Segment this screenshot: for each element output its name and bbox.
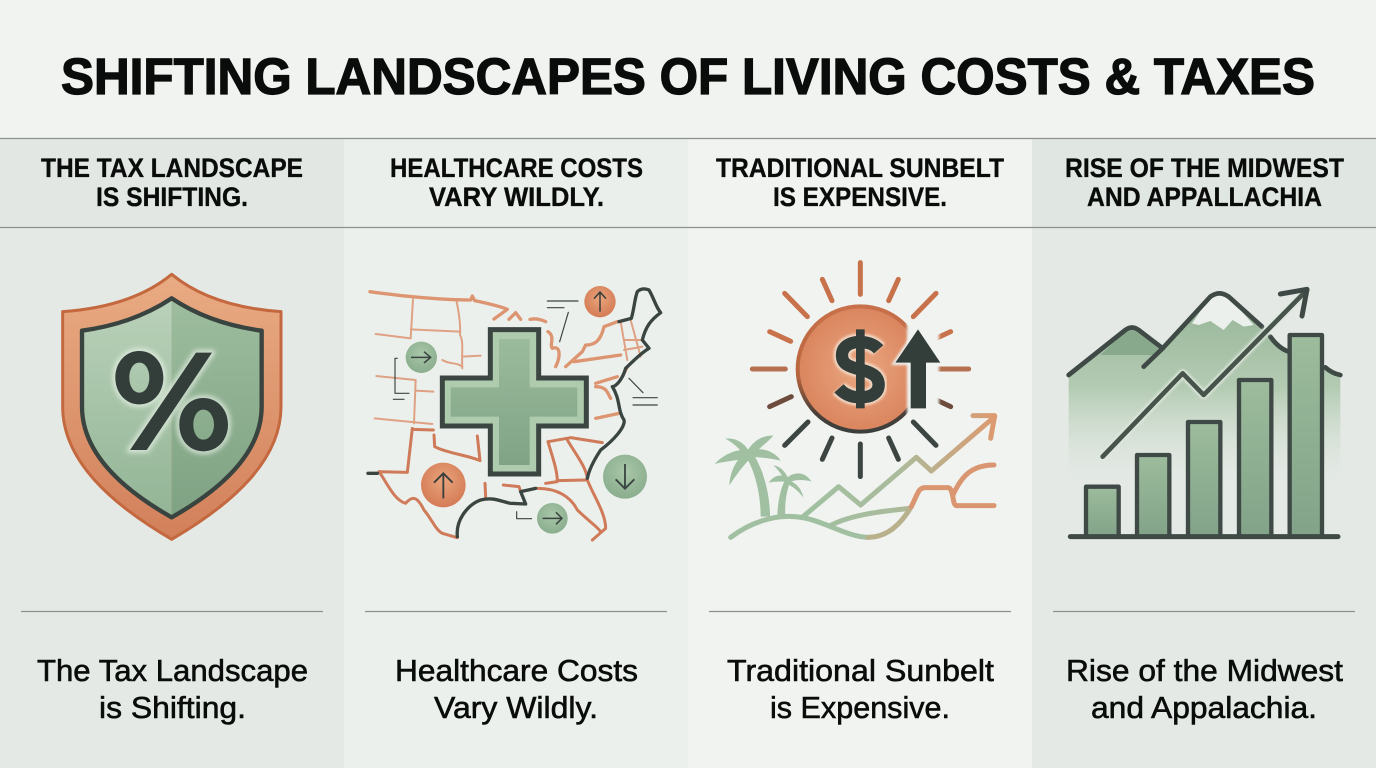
baseline <box>1070 529 1338 544</box>
icon: mountains and rising bar chart <box>1069 289 1340 537</box>
caption: tax landscape: The Tax Landscape <box>37 653 308 688</box>
heading: sunbelt: TRADITIONAL SUNBELT <box>716 153 1004 183</box>
mountain outline <box>1069 293 1340 375</box>
heading: midwest: RISE OF THE MIDWEST <box>1065 153 1344 183</box>
sun rays <box>752 263 969 477</box>
arrow badge: up large <box>421 463 466 507</box>
caption: tax landscape <box>37 653 308 725</box>
caption: sunbelt: is Expensive. <box>770 690 950 725</box>
trend arrow <box>1103 289 1307 457</box>
caption: sunbelt: Traditional Sunbelt <box>727 653 994 688</box>
heading: healthcare: VARY WILDLY. <box>429 182 604 212</box>
panel: sunbelt <box>688 139 1032 768</box>
icon: US map with medical cross <box>368 286 661 540</box>
heading: healthcare <box>390 153 643 212</box>
map state borders <box>368 289 661 540</box>
caption: midwest: Rise of the Midwest <box>1066 653 1343 688</box>
caption: tax landscape: is Shifting. <box>99 690 246 725</box>
medical cross <box>442 330 586 474</box>
icon: sun with dollar and palms <box>715 263 995 537</box>
caption: midwest <box>1066 653 1343 725</box>
mountain background <box>1069 293 1340 483</box>
heading: tax landscape <box>41 153 303 212</box>
growth line and hills <box>803 416 995 525</box>
heading: midwest: AND APPALLACHIA <box>1087 182 1322 212</box>
up arrow <box>895 329 940 408</box>
caption: healthcare: Vary Wildly. <box>434 690 598 725</box>
sun coin <box>798 306 939 432</box>
caption: healthcare: Healthcare Costs <box>395 653 638 688</box>
panel: tax landscape <box>0 139 344 768</box>
caption: healthcare <box>395 653 638 725</box>
heading: midwest <box>1065 153 1344 212</box>
arrow badge: down <box>603 455 647 499</box>
panel: healthcare <box>344 139 688 768</box>
caption: midwest: and Appalachia. <box>1091 690 1317 725</box>
heading: healthcare: HEALTHCARE COSTS <box>390 153 643 183</box>
arrow badge: right lower <box>537 503 568 534</box>
panel: midwest <box>1032 139 1376 768</box>
icon: shield with percent <box>63 274 281 539</box>
heading: tax landscape: THE TAX LANDSCAPE <box>41 153 303 183</box>
palm trees <box>715 436 811 517</box>
title: SHIFTING LANDSCAPES OF LIVING COSTS & TAXES <box>61 48 1315 105</box>
heading: tax landscape: IS SHIFTING. <box>96 182 248 212</box>
bars <box>1086 335 1322 537</box>
dollar sign <box>839 329 879 408</box>
arrow badge: right <box>406 342 437 373</box>
heading: sunbelt <box>716 153 1004 212</box>
caption: sunbelt <box>727 653 994 725</box>
arrow badge: up small <box>584 286 616 317</box>
heading: sunbelt: IS EXPENSIVE. <box>773 182 947 212</box>
